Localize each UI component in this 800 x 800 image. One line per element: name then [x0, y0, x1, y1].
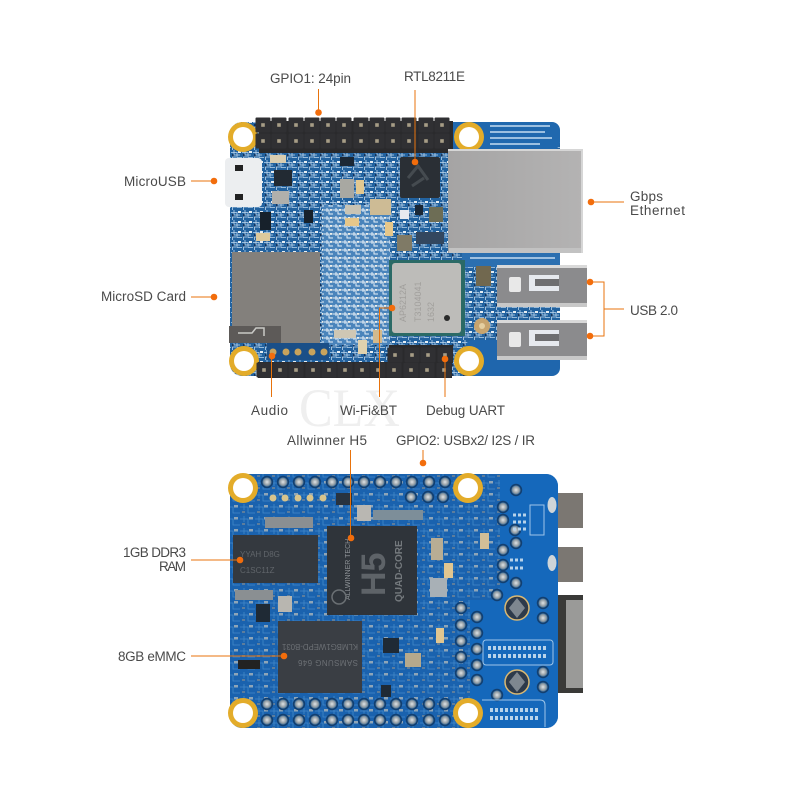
- callout: RTL8211E: RTL8211E: [404, 69, 465, 84]
- pads and screws: right side: [455, 484, 556, 727]
- WiFi module: 1632: [426, 302, 436, 322]
- watermark: CLX: [299, 378, 400, 438]
- board: bottom side: [228, 473, 583, 728]
- callout: Wi-Fi&BT: [340, 305, 397, 418]
- ports behind board: [558, 493, 583, 693]
- callout: MicroUSB: [124, 174, 217, 189]
- microUSB port: [225, 158, 262, 207]
- components: [235, 493, 489, 697]
- callout: 1GB DDR3 RAM: 1GB DDR3: [123, 545, 186, 560]
- callout: Gbps Ethernet: Gbps: [630, 189, 663, 204]
- eMMC chip: [278, 621, 362, 693]
- callout: GPIO1: [270, 71, 351, 116]
- ethernet jack: [448, 149, 583, 253]
- callout: MicroSD Card: MicroSD Card: [101, 289, 186, 304]
- callout: Wi-Fi&BT: Wi-Fi&BT: [340, 403, 397, 418]
- callout: USB 2.0: USB 2.0: [630, 303, 678, 318]
- Allwinner H5 chip: ALLWINNER TECH: [345, 539, 352, 600]
- callout: Debug UART: Debug UART: [426, 403, 505, 418]
- pcb: [230, 474, 558, 728]
- microSD slot: [229, 252, 320, 343]
- mounting holes: [228, 122, 484, 376]
- callout: Audio: [251, 353, 288, 418]
- callout: 8GB eMMC: 8GB eMMC: [118, 649, 186, 664]
- callout: Allwinner H5: Allwinner H5: [287, 433, 367, 448]
- callout: 1GB DDR3 RAM: RAM: [159, 559, 186, 574]
- callout: Debug UART: [426, 356, 505, 418]
- callout: Allwinner H5: [287, 433, 367, 541]
- callout: Audio: Audio: [251, 403, 288, 418]
- header: debug UART: [388, 345, 453, 363]
- callout: Gbps Ethernet: [588, 189, 685, 218]
- header: bottom row: [256, 362, 452, 378]
- RAM chip: [233, 535, 318, 583]
- callout: MicroUSB: MicroUSB: [124, 174, 186, 189]
- pads: GPIO2 row: [261, 476, 451, 503]
- Allwinner H5 chip: QUAD-CORE: [394, 540, 405, 602]
- Allwinner H5 chip: H5: [355, 553, 393, 596]
- callout: GPIO2: GPIO2: USBx2/ I2S / IR: [396, 433, 535, 448]
- mounting holes: [228, 473, 483, 728]
- WiFi module: [389, 260, 465, 336]
- USB ports: [497, 265, 587, 360]
- callout: 8GB eMMC: [118, 649, 287, 664]
- pads: GPIO1 rows: [261, 698, 451, 726]
- Allwinner H5 chip: [327, 526, 417, 615]
- RTL8211E chip: [400, 157, 440, 198]
- callout: Gbps Ethernet: Ethernet: [630, 203, 685, 218]
- callout: USB 2.0: [587, 279, 678, 339]
- audio pads: [267, 343, 329, 360]
- WiFi module: AP6212A: [398, 284, 408, 322]
- RAM chip: C1SC11Z: [240, 566, 275, 575]
- components: [256, 155, 491, 354]
- eMMC chip: SAMSUNG 646: [297, 658, 358, 667]
- callout: RTL8211E: [404, 69, 465, 165]
- callout: GPIO2: [396, 433, 535, 466]
- board: top side: [225, 118, 587, 378]
- pcb: [230, 122, 560, 376]
- WiFi module: T3104041: [413, 281, 423, 322]
- header: GPIO1: [256, 118, 453, 153]
- callout: 1GB DDR3 RAM: [123, 545, 243, 574]
- RAM chip: YYAH D8G: [240, 550, 280, 559]
- callout: GPIO1: GPIO1: 24pin: [270, 71, 351, 86]
- eMMC chip: KLMBG1WEPD-B031: [281, 642, 358, 651]
